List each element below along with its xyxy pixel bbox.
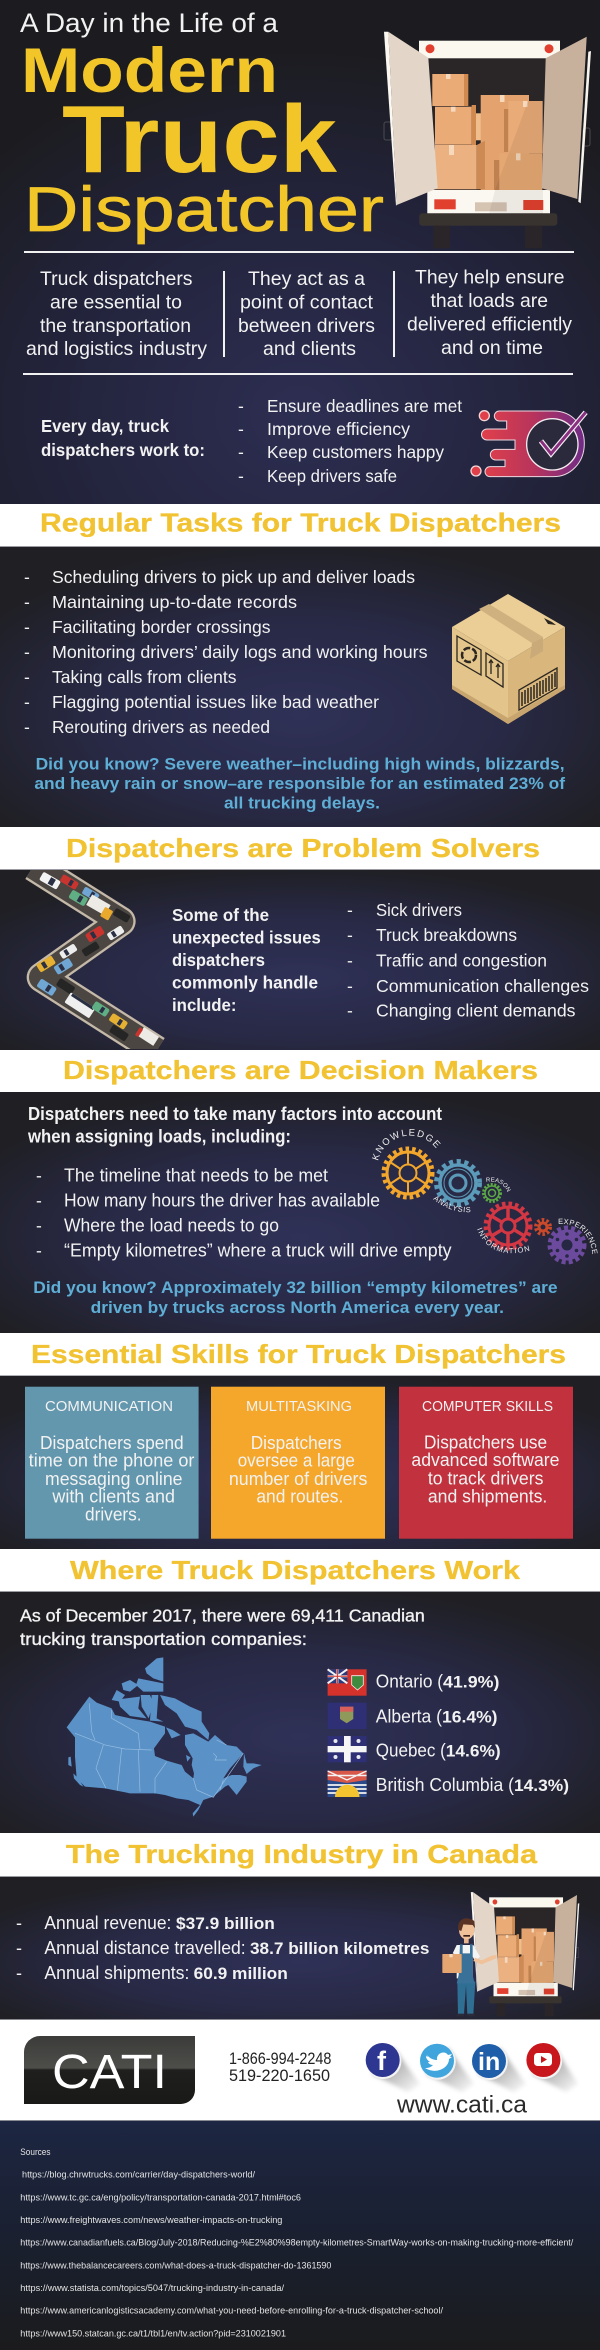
list: issues: Traffic and congestion xyxy=(376,950,547,970)
flag: Quebec xyxy=(328,1736,367,1762)
list: daily goals xyxy=(238,396,462,486)
card: computer skills: advanced software xyxy=(411,1450,560,1470)
illustration: gears xyxy=(372,1129,598,1264)
list: factors: - xyxy=(36,1166,42,1186)
card: multitasking: MULTITASKING xyxy=(246,1398,352,1415)
map: Canada xyxy=(67,1657,262,1817)
icon: Facebook xyxy=(366,2043,420,2092)
gear labels: INFORMATION xyxy=(477,1228,530,1254)
card: multitasking xyxy=(211,1387,385,1539)
heading: decision makers: Dispatchers are Decision Makers xyxy=(63,1055,538,1085)
list: factors xyxy=(36,1166,452,1261)
panel: sources xyxy=(0,2121,600,2350)
list: industry stats: - xyxy=(16,1913,22,1933)
heading: trucking industry: The Trucking Industry in Canada xyxy=(66,1839,538,1869)
list: issues: Communication challenges xyxy=(376,976,589,996)
card: communication: COMMUNICATION xyxy=(45,1398,173,1415)
list: tasks: - xyxy=(24,617,30,637)
list: issues: Truck breakdowns xyxy=(376,925,517,945)
contact: phone numbers xyxy=(229,2049,331,2085)
intro columns xyxy=(23,251,574,375)
gear: experience xyxy=(550,1228,584,1262)
intro text: essential xyxy=(26,268,207,360)
list: tasks: Scheduling drivers to pick up and deliver loads xyxy=(52,567,415,587)
list: tasks xyxy=(24,567,428,737)
intro text: contact: and clients xyxy=(263,338,356,360)
illustration: delivery worker xyxy=(442,1918,497,2016)
contact: phone numbers: 519-220-1650 xyxy=(229,2066,330,2085)
card: communication: with clients and xyxy=(51,1487,175,1507)
heading: problem solvers: Dispatchers are Problem Solvers xyxy=(66,833,540,863)
list: tasks: - xyxy=(24,717,30,737)
title: Modern xyxy=(21,36,278,106)
icon: fast checkmark xyxy=(471,411,586,477)
card: multitasking: and routes. xyxy=(256,1487,343,1507)
icon: LinkedIn: in xyxy=(478,2048,500,2076)
text: unexpected issues: include: xyxy=(172,995,236,1015)
list: tasks: - xyxy=(24,567,30,587)
lead-in: every day xyxy=(41,416,205,460)
list: daily goals: Improve efficiency xyxy=(267,419,410,439)
legend: provinces: British Columbia ( xyxy=(376,1775,514,1795)
text: unexpected issues: dispatchers xyxy=(172,950,265,970)
card: communication xyxy=(25,1387,199,1539)
illustration: open truck with boxes xyxy=(384,32,591,248)
illustration: small truck xyxy=(471,1892,579,2016)
list: industry stats: Annual shipments: xyxy=(44,1963,189,1983)
title: A Day in the Life of a xyxy=(20,8,279,38)
text: factors xyxy=(27,1104,442,1147)
list: tasks: Monitoring drivers’ daily logs and working hours xyxy=(52,642,428,662)
list: issues xyxy=(347,900,589,1021)
list: tasks: Flagging potential issues like bad weather xyxy=(52,692,379,712)
sources list: https://www.thebalancecareers.com/what-does-a-truck-dispatcher-do-1361590 xyxy=(20,2260,331,2271)
intro text: ensure: They help ensure xyxy=(415,266,564,288)
list: daily goals: - xyxy=(238,396,244,416)
text: company count: trucking transportation companies: xyxy=(20,1629,307,1649)
list: factors: The timeline that needs to be met xyxy=(64,1166,328,1186)
gear: information xyxy=(486,1204,530,1248)
intro text: essential: Truck dispatchers xyxy=(40,268,193,290)
intro text: contact: point of contact xyxy=(240,292,374,314)
legend: provinces: 41.9%) xyxy=(443,1673,499,1692)
sources list: https://blog.chrwtrucks.com/carrier/day-dispatchers-world/ xyxy=(22,2170,255,2181)
list: issues: Sick drivers xyxy=(376,900,462,920)
intro text: essential: the transportation xyxy=(40,315,191,337)
intro text: ensure: that loads are xyxy=(430,290,548,312)
list: factors: - xyxy=(36,1241,42,1261)
text: factors: when assigning loads, including: xyxy=(27,1127,291,1147)
gear labels: ANALYSIS xyxy=(433,1196,470,1212)
legend: provinces: Alberta ( xyxy=(376,1706,442,1726)
list: issues: - xyxy=(347,1001,353,1021)
contact: website: www.cati.ca xyxy=(396,2092,528,2119)
card: computer skills: and shipments. xyxy=(428,1486,547,1506)
text: unexpected issues: unexpected issues xyxy=(172,928,321,948)
list: factors: - xyxy=(36,1191,42,1211)
card: communication: messaging online xyxy=(45,1469,182,1489)
heading: where dispatchers work: Where Truck Dispatchers Work xyxy=(70,1555,521,1585)
sources list xyxy=(20,2170,574,2339)
heading: essential skills xyxy=(0,1333,600,1376)
icon: Facebook: f xyxy=(377,2046,387,2076)
list: factors: Where the load needs to go xyxy=(64,1216,279,1236)
list: factors: - xyxy=(36,1216,42,1236)
card: computer skills: to track drivers xyxy=(428,1468,543,1488)
list: issues: - xyxy=(347,900,353,920)
callout: severe weather: all trucking delays. xyxy=(224,795,380,813)
panel: problem solvers xyxy=(0,866,600,1051)
heading: regular tasks: Regular Tasks for Truck Dispatchers xyxy=(40,508,561,538)
gear: analysis xyxy=(437,1162,479,1204)
lead-in: every day: Every day, truck xyxy=(41,416,169,436)
list: industry stats: $37.9 billion xyxy=(176,1914,275,1933)
gear labels: KNOWLEDGE xyxy=(372,1129,441,1160)
sources list: https://www.statista.com/topics/5047/trucking-industry-in-canada/ xyxy=(20,2283,284,2294)
list: tasks: Facilitating border crossings xyxy=(52,617,271,637)
panel: regular tasks xyxy=(0,547,600,827)
heading: trucking industry xyxy=(0,1833,600,1877)
heading: decision makers xyxy=(0,1050,600,1092)
list: issues: Changing client demands xyxy=(376,1001,576,1021)
card: computer skills: COMPUTER SKILLS xyxy=(422,1398,553,1415)
card: communication: time on the phone or xyxy=(29,1451,194,1471)
intro text: essential: are essential to xyxy=(50,292,182,314)
heading: regular tasks xyxy=(0,504,600,547)
panel: essential skills xyxy=(0,1376,600,1549)
card: multitasking: number of drivers xyxy=(229,1469,367,1489)
panel: where dispatchers work xyxy=(0,1592,600,1833)
callout: empty kilometres xyxy=(33,1278,558,1317)
list: factors: “Empty kilometres” where a truck will drive empty xyxy=(64,1241,452,1261)
callout: severe weather: Did you know? Severe weather–including high winds, blizzards, xyxy=(36,755,565,773)
icon: LinkedIn xyxy=(472,2044,526,2092)
list: daily goals: - xyxy=(238,442,244,462)
legend: provinces: Ontario ( xyxy=(376,1672,443,1692)
text: unexpected issues: Some of the xyxy=(172,905,269,925)
list: tasks: - xyxy=(24,592,30,612)
gear labels: EXPERIENCE xyxy=(558,1218,598,1254)
intro text: ensure xyxy=(407,266,572,359)
list: tasks: Maintaining up-to-date records xyxy=(52,592,297,612)
text: unexpected issues: commonly handle xyxy=(172,973,318,993)
legend: provinces: 14.6%) xyxy=(446,1742,501,1761)
list: issues: - xyxy=(347,976,353,996)
text: factors: Dispatchers need to take many factors into account xyxy=(28,1104,442,1124)
intro text: contact xyxy=(238,268,375,360)
text: company count xyxy=(20,1606,425,1649)
sources list: https://www.freightwaves.com/news/weather-impacts-on-trucking xyxy=(20,2215,282,2226)
list: industry stats xyxy=(16,1913,429,1983)
callout: severe weather: and heavy rain or snow–are responsible for an estimated 23% of xyxy=(34,775,566,793)
list: tasks: - xyxy=(24,667,30,687)
list: issues: - xyxy=(347,925,353,945)
list: industry stats: - xyxy=(16,1963,22,1983)
icon: cardboard box xyxy=(452,594,565,724)
list: industry stats: 38.7 billion kilometres xyxy=(250,1939,429,1958)
gear: reason xyxy=(484,1184,500,1202)
card: communication: Dispatchers spend xyxy=(40,1433,184,1453)
logo: CATI: CATI xyxy=(52,2046,167,2099)
list: industry stats: 60.9 million xyxy=(194,1964,288,1983)
list: daily goals: Keep customers happy xyxy=(267,442,444,462)
heading: problem solvers xyxy=(0,827,600,870)
text: company count: As of December 2017, there were 69,411 Canadian xyxy=(20,1606,425,1626)
list: tasks: Rerouting drivers as needed xyxy=(52,717,270,737)
legend: provinces: 16.4%) xyxy=(442,1707,498,1726)
lead-in: every day: dispatchers work to: xyxy=(41,440,205,460)
list: tasks: - xyxy=(24,642,30,662)
gear: knowledge xyxy=(384,1149,432,1197)
gear: small xyxy=(536,1220,550,1234)
icon: Twitter xyxy=(420,2044,474,2092)
list: industry stats: Annual distance travelled: xyxy=(44,1938,246,1958)
intro text: essential: and logistics industry xyxy=(26,338,207,360)
intro text: contact: They act as a xyxy=(248,268,365,290)
logo: CATI xyxy=(24,2036,195,2104)
gear labels xyxy=(372,1129,598,1254)
text: unexpected issues xyxy=(172,905,321,1015)
legend: provinces: 14.3%) xyxy=(514,1776,569,1795)
title xyxy=(20,8,384,245)
panel: decision makers xyxy=(0,1104,600,1333)
card: computer skills: Dispatchers use xyxy=(424,1432,547,1452)
heading: where dispatchers work xyxy=(0,1549,600,1592)
list: daily goals: Keep drivers safe xyxy=(267,466,397,486)
list: daily goals: - xyxy=(238,466,244,486)
panel: hero header xyxy=(0,0,600,504)
list: tasks: Taking calls from clients xyxy=(52,667,237,687)
intro text: contact: between drivers xyxy=(238,315,375,337)
callout: empty kilometres: driven by trucks across North America every year. xyxy=(91,1298,504,1317)
gear labels: REASON xyxy=(486,1177,511,1192)
flag: Alberta xyxy=(328,1703,367,1729)
title: Truck xyxy=(62,86,338,193)
title: Dispatcher xyxy=(24,175,384,245)
panel: footer contact xyxy=(0,2019,600,2121)
sources heading: Sources xyxy=(20,2147,51,2158)
panel: trucking industry xyxy=(0,1877,600,2019)
flag: Ontario xyxy=(328,1669,367,1696)
callout: empty kilometres: Did you know? Approximately 32 billion “empty kilometres” are xyxy=(33,1278,558,1297)
list: industry stats: - xyxy=(16,1938,22,1958)
contact: phone numbers: 1-866-994-2248 xyxy=(229,2049,331,2068)
list: factors: How many hours the driver has available xyxy=(64,1191,380,1211)
list: industry stats: Annual revenue: xyxy=(44,1913,171,1933)
list: daily goals: Ensure deadlines are met xyxy=(267,396,462,416)
list: issues: - xyxy=(347,950,353,970)
legend: provinces: Quebec ( xyxy=(376,1741,446,1761)
callout: severe weather xyxy=(34,755,566,813)
icon: YouTube xyxy=(526,2043,578,2092)
intro text: ensure: delivered efficiently xyxy=(407,314,572,336)
legend: provinces xyxy=(376,1672,569,1795)
sources list: https://www.americanlogisticsacademy.com/what-you-need-before-enrolling-for-a-truck-dispatcher-school/ xyxy=(20,2306,443,2317)
card: communication: drivers. xyxy=(85,1505,142,1525)
sources list: https://www.canadianfuels.ca/Blog/July-2018/Reducing-%E2%80%98empty-kilometres-SmartWay-works-on-making-trucking-more-efficient/ xyxy=(20,2238,574,2249)
intro text: ensure: and on time xyxy=(441,337,543,359)
flag: British Columbia xyxy=(328,1771,367,1797)
sources list: https://www.tc.gc.ca/eng/policy/transportation-canada-2017.html#toc6 xyxy=(20,2192,301,2203)
heading: essential skills: Essential Skills for Truck Dispatchers xyxy=(31,1339,566,1369)
card: multitasking: Dispatchers xyxy=(251,1433,342,1453)
card: computer skills xyxy=(399,1387,573,1539)
illustration: road with traffic xyxy=(33,866,159,1051)
list: tasks: - xyxy=(24,692,30,712)
list: daily goals: - xyxy=(238,419,244,439)
sources list: https://www150.statcan.gc.ca/t1/tbl1/en/tv.action?pid=2310021901 xyxy=(20,2328,286,2339)
card: multitasking: oversee a large xyxy=(238,1451,355,1471)
